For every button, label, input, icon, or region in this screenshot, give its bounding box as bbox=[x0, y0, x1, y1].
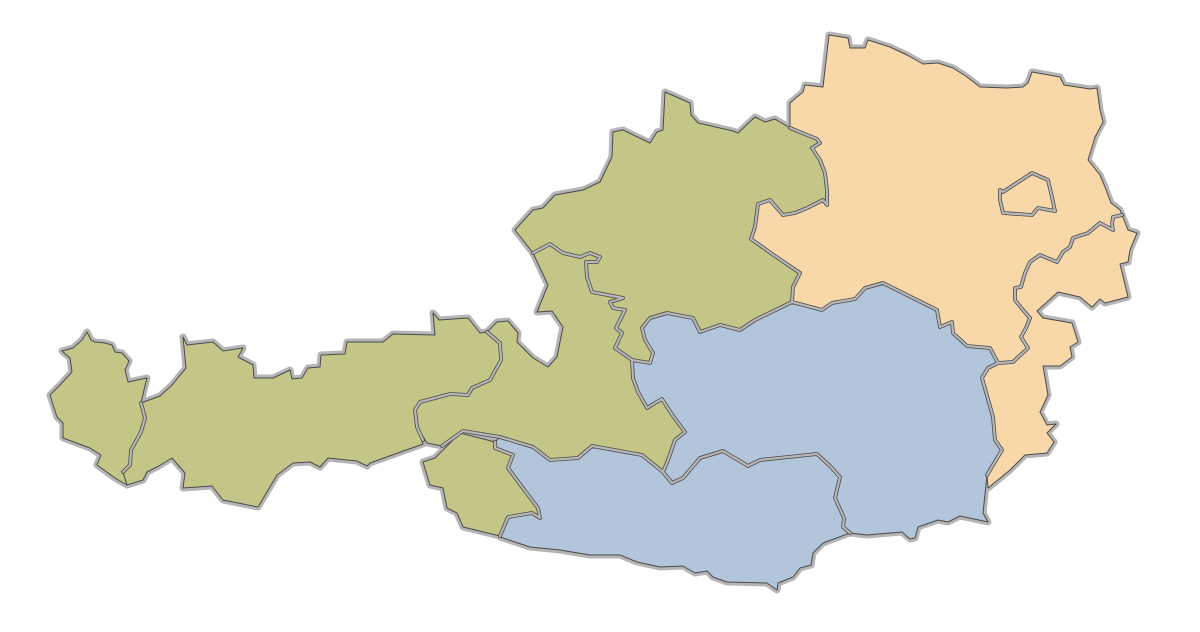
region: Niederoesterreich bbox=[751, 35, 1122, 363]
region: Burgenland bbox=[982, 215, 1137, 488]
region: Vorarlberg bbox=[50, 332, 147, 485]
region: Tirol bbox=[123, 313, 501, 507]
outer grey halo bbox=[50, 35, 1137, 590]
region: Oberoesterreich bbox=[515, 92, 827, 363]
region: Salzburg bbox=[415, 244, 685, 472]
region: Steiermark bbox=[632, 283, 1002, 539]
region: Wien bbox=[1000, 173, 1055, 215]
region: Osttirol bbox=[423, 433, 540, 536]
region: Kaernten bbox=[495, 437, 850, 590]
internal borders bbox=[123, 128, 1122, 536]
